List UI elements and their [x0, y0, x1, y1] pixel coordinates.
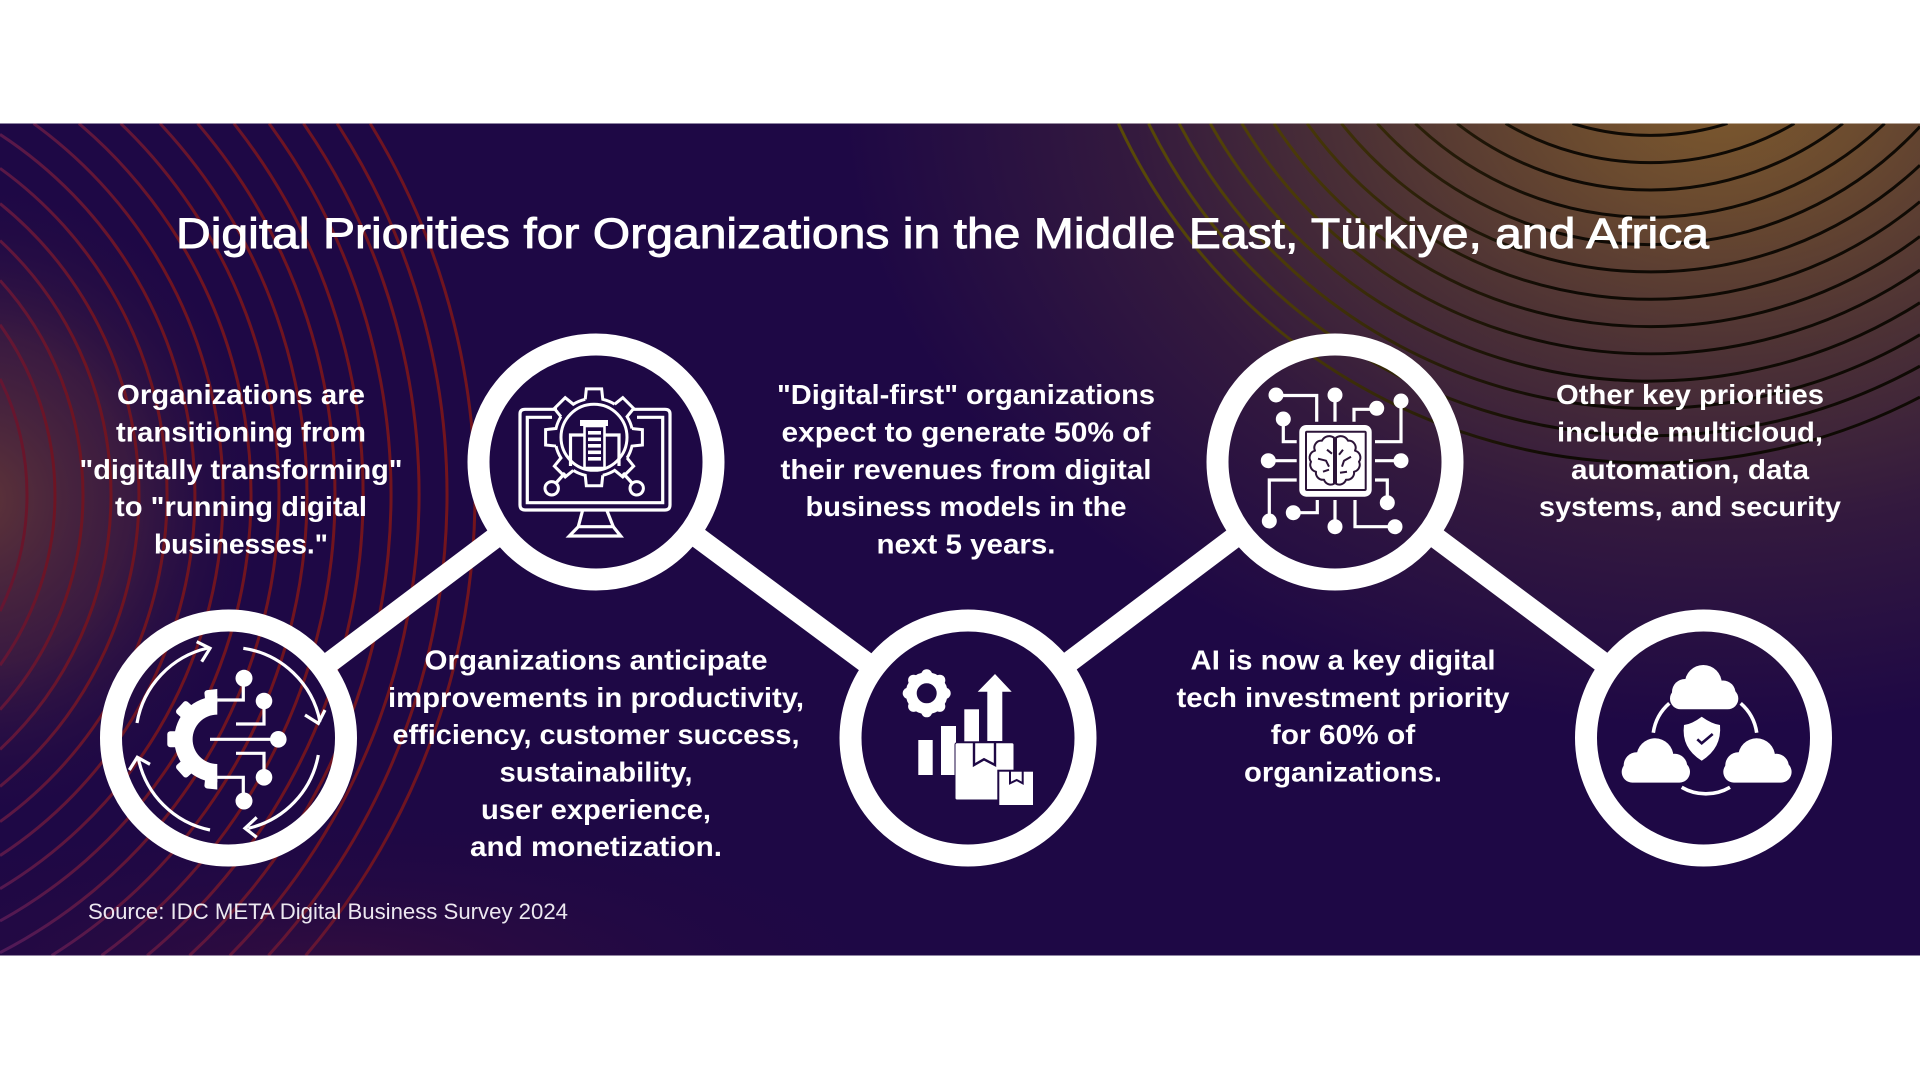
text: organizations transitioning: to "running digital [115, 491, 367, 522]
text: AI investment priority [1176, 644, 1510, 787]
icon: half gear [167, 689, 221, 790]
text: digital-first revenues: "Digital-first" organizations [777, 379, 1155, 410]
icon: gear connector nodes [545, 473, 643, 495]
text: other key priorities: systems, and security [1539, 491, 1842, 522]
text: AI investment priority: AI is now a key digital [1190, 644, 1496, 676]
icon: chip traces [1261, 388, 1408, 534]
text: digital-first revenues: business models in the [806, 491, 1126, 522]
step 2 circle with monitor and gear icon [478, 344, 714, 580]
text: anticipated improvements: Organizations anticipate [424, 644, 768, 676]
text: organizations transitioning: transitioning from [116, 416, 366, 447]
connector lines between circles [323, 532, 1609, 668]
icon: circuit traces [210, 670, 287, 810]
step 4 circle with AI chip icon [1218, 344, 1452, 580]
text: organizations transitioning: "digitally transforming" [80, 454, 402, 485]
step 3 circle with growth chart and boxes icon [850, 620, 1086, 856]
text: organizations transitioning: Organizations are [117, 379, 365, 410]
text: digital-first revenues: their revenues from digital [780, 454, 1152, 485]
step 1 circle with gear and circuit icon [111, 620, 346, 856]
text: anticipated improvements: sustainability, [500, 756, 692, 787]
text: AI investment priority: organizations. [1244, 756, 1442, 787]
text: anticipated improvements: user experience, [481, 794, 711, 825]
icon: boxes [955, 743, 1034, 806]
text: anticipated improvements: efficiency, customer success, [392, 719, 800, 750]
icon: left cloud [1622, 738, 1690, 783]
text: anticipated improvements: improvements in productivity, [388, 682, 804, 713]
text: organizations transitioning: businesses." [154, 529, 328, 560]
icon: brain [1310, 436, 1360, 485]
icon: monitor [520, 409, 670, 536]
icon: shield with check [1684, 717, 1720, 761]
infographic canvas [0, 124, 1920, 956]
text: anticipated improvements: and monetization. [470, 831, 722, 862]
text: digital-first revenues: expect to generate 50% of [782, 416, 1151, 447]
icon: top cloud [1670, 665, 1738, 709]
text: anticipated improvements [388, 644, 804, 862]
icon: connecting ring arcs [1653, 703, 1757, 794]
icon: small gear [903, 669, 951, 717]
step 5 circle with cloud security icon [1586, 620, 1821, 856]
source note: Source: IDC META Digital Business Survey 2024 [88, 899, 568, 924]
text: digital-first revenues: next 5 years. [876, 529, 1056, 560]
icon: cycle arrows [129, 642, 325, 837]
icon: right cloud [1723, 738, 1792, 783]
text: other key priorities: include multicloud, [1557, 416, 1823, 447]
text: other key priorities [1539, 379, 1842, 522]
text: AI investment priority: tech investment priority [1176, 682, 1510, 713]
text: AI investment priority: for 60% of [1271, 719, 1416, 750]
banner background [0, 124, 1920, 956]
text: other key priorities: automation, data [1571, 454, 1810, 485]
text: other key priorities: Other key priorities [1556, 379, 1824, 410]
icon: server inside gear [570, 420, 619, 468]
icon: gear outline [545, 388, 643, 486]
text: organizations transitioning [80, 379, 402, 560]
icon: chip body [1299, 425, 1372, 497]
title: Digital Priorities for Organizations in the Middle East, Türkiye, and Africa [176, 210, 1709, 258]
icon: rising bars and arrow [918, 674, 1012, 775]
text: digital-first revenues [777, 379, 1155, 560]
